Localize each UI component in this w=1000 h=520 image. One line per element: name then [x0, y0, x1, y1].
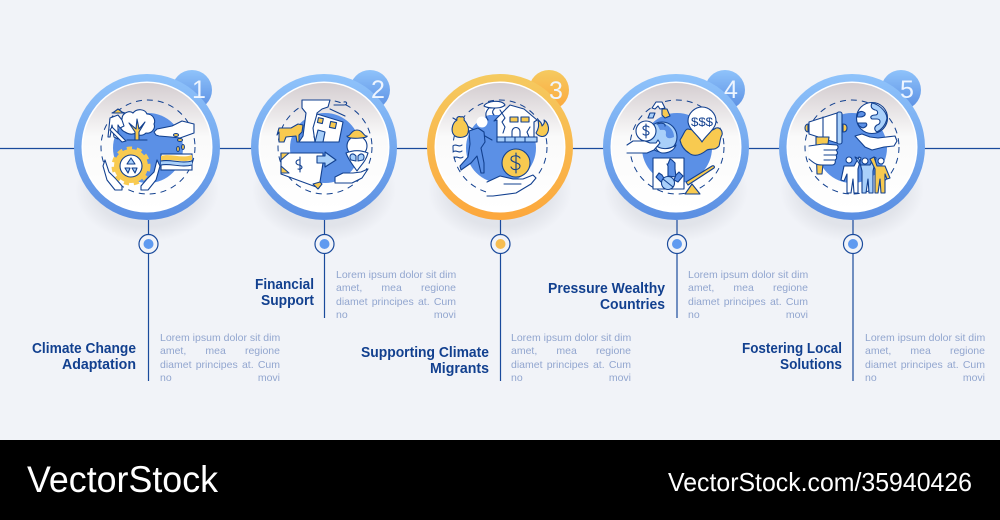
body text 2: no movi — [336, 309, 456, 321]
heading: financial support: Support — [261, 293, 314, 309]
body text 4: no movi — [688, 309, 808, 321]
heading: pressure wealthy countries — [548, 281, 665, 313]
footer image id: VectorStock.com/35940426 — [668, 467, 972, 497]
heading: climate change adaptation: Adaptation — [62, 357, 136, 373]
step 4 number: 4 — [724, 76, 738, 104]
step 3 node — [427, 70, 573, 242]
body text 4: Lorem ipsum dolor sit dim — [688, 269, 808, 281]
step 5 connector and dot — [844, 220, 862, 381]
heading: financial support: Financial — [255, 277, 314, 293]
step 5 node — [779, 70, 925, 242]
heading: fostering local solutions — [742, 341, 842, 373]
icon: climate migrants — [452, 100, 548, 196]
step 3 connector and dot — [491, 220, 510, 381]
body text 4 — [688, 269, 808, 321]
body text 3: Lorem ipsum dolor sit dim — [511, 332, 631, 344]
heading: climate change adaptation — [32, 341, 136, 373]
step 2 number: 2 — [371, 76, 385, 104]
step 1 node — [74, 70, 220, 242]
step 5 number: 5 — [900, 76, 914, 104]
heading: fostering local solutions: Fostering Local — [742, 341, 842, 357]
step 3 number: 3 — [549, 77, 563, 105]
heading: fostering local solutions: Solutions — [780, 357, 842, 373]
body text 5: amet, mea regione — [865, 345, 985, 357]
icon: financial support — [277, 100, 372, 194]
body text 3: diamet principes at. Cum — [511, 359, 631, 371]
heading: climate change adaptation: Climate Change — [32, 341, 136, 357]
heading: supporting climate migrants: Supporting Climate — [361, 345, 489, 361]
body text 3 — [511, 332, 631, 384]
body text 1: Lorem ipsum dolor sit dim — [160, 332, 280, 344]
body text 1: diamet principes at. Cum — [160, 359, 280, 371]
step 2 node — [251, 70, 397, 242]
step 4 connector and dot — [668, 220, 686, 318]
body text 1: amet, mea regione — [160, 345, 280, 357]
body text 5: Lorem ipsum dolor sit dim — [865, 332, 985, 344]
body text 5 — [865, 332, 985, 384]
step 2 connector and dot — [315, 220, 334, 318]
icon: pressure wealthy countries — [627, 100, 724, 194]
footer bar — [0, 440, 1000, 520]
heading: pressure wealthy countries: Pressure Wealthy — [548, 281, 665, 297]
icon: climate adaptation — [101, 100, 195, 194]
icon: pressure wealthy countries: $$$ — [691, 115, 713, 129]
body text 2: amet, mea regione — [336, 282, 456, 294]
body text 3: amet, mea regione — [511, 345, 631, 357]
body text 2 — [336, 269, 456, 321]
body text 4: amet, mea regione — [688, 282, 808, 294]
body text 3: no movi — [511, 372, 631, 384]
step 1 number: 1 — [192, 76, 206, 104]
body text 2: diamet principes at. Cum — [336, 296, 456, 308]
body text 4: diamet principes at. Cum — [688, 296, 808, 308]
body text 5: no movi — [865, 372, 985, 384]
heading: financial support — [255, 277, 314, 309]
step 1 connector and dot — [139, 220, 158, 381]
footer logo: VectorStock — [27, 459, 218, 500]
body text 1 — [160, 332, 280, 384]
heading: supporting climate migrants — [361, 345, 489, 377]
body text 1: no movi — [160, 372, 280, 384]
step 4 node — [603, 70, 749, 242]
heading: supporting climate migrants: Migrants — [430, 361, 489, 377]
body text 5: diamet principes at. Cum — [865, 359, 985, 371]
body text 2: Lorem ipsum dolor sit dim — [336, 269, 456, 281]
horizontal timeline line — [0, 148, 1000, 150]
heading: pressure wealthy countries: Countries — [600, 297, 665, 313]
icon: fostering local solutions — [805, 100, 899, 194]
